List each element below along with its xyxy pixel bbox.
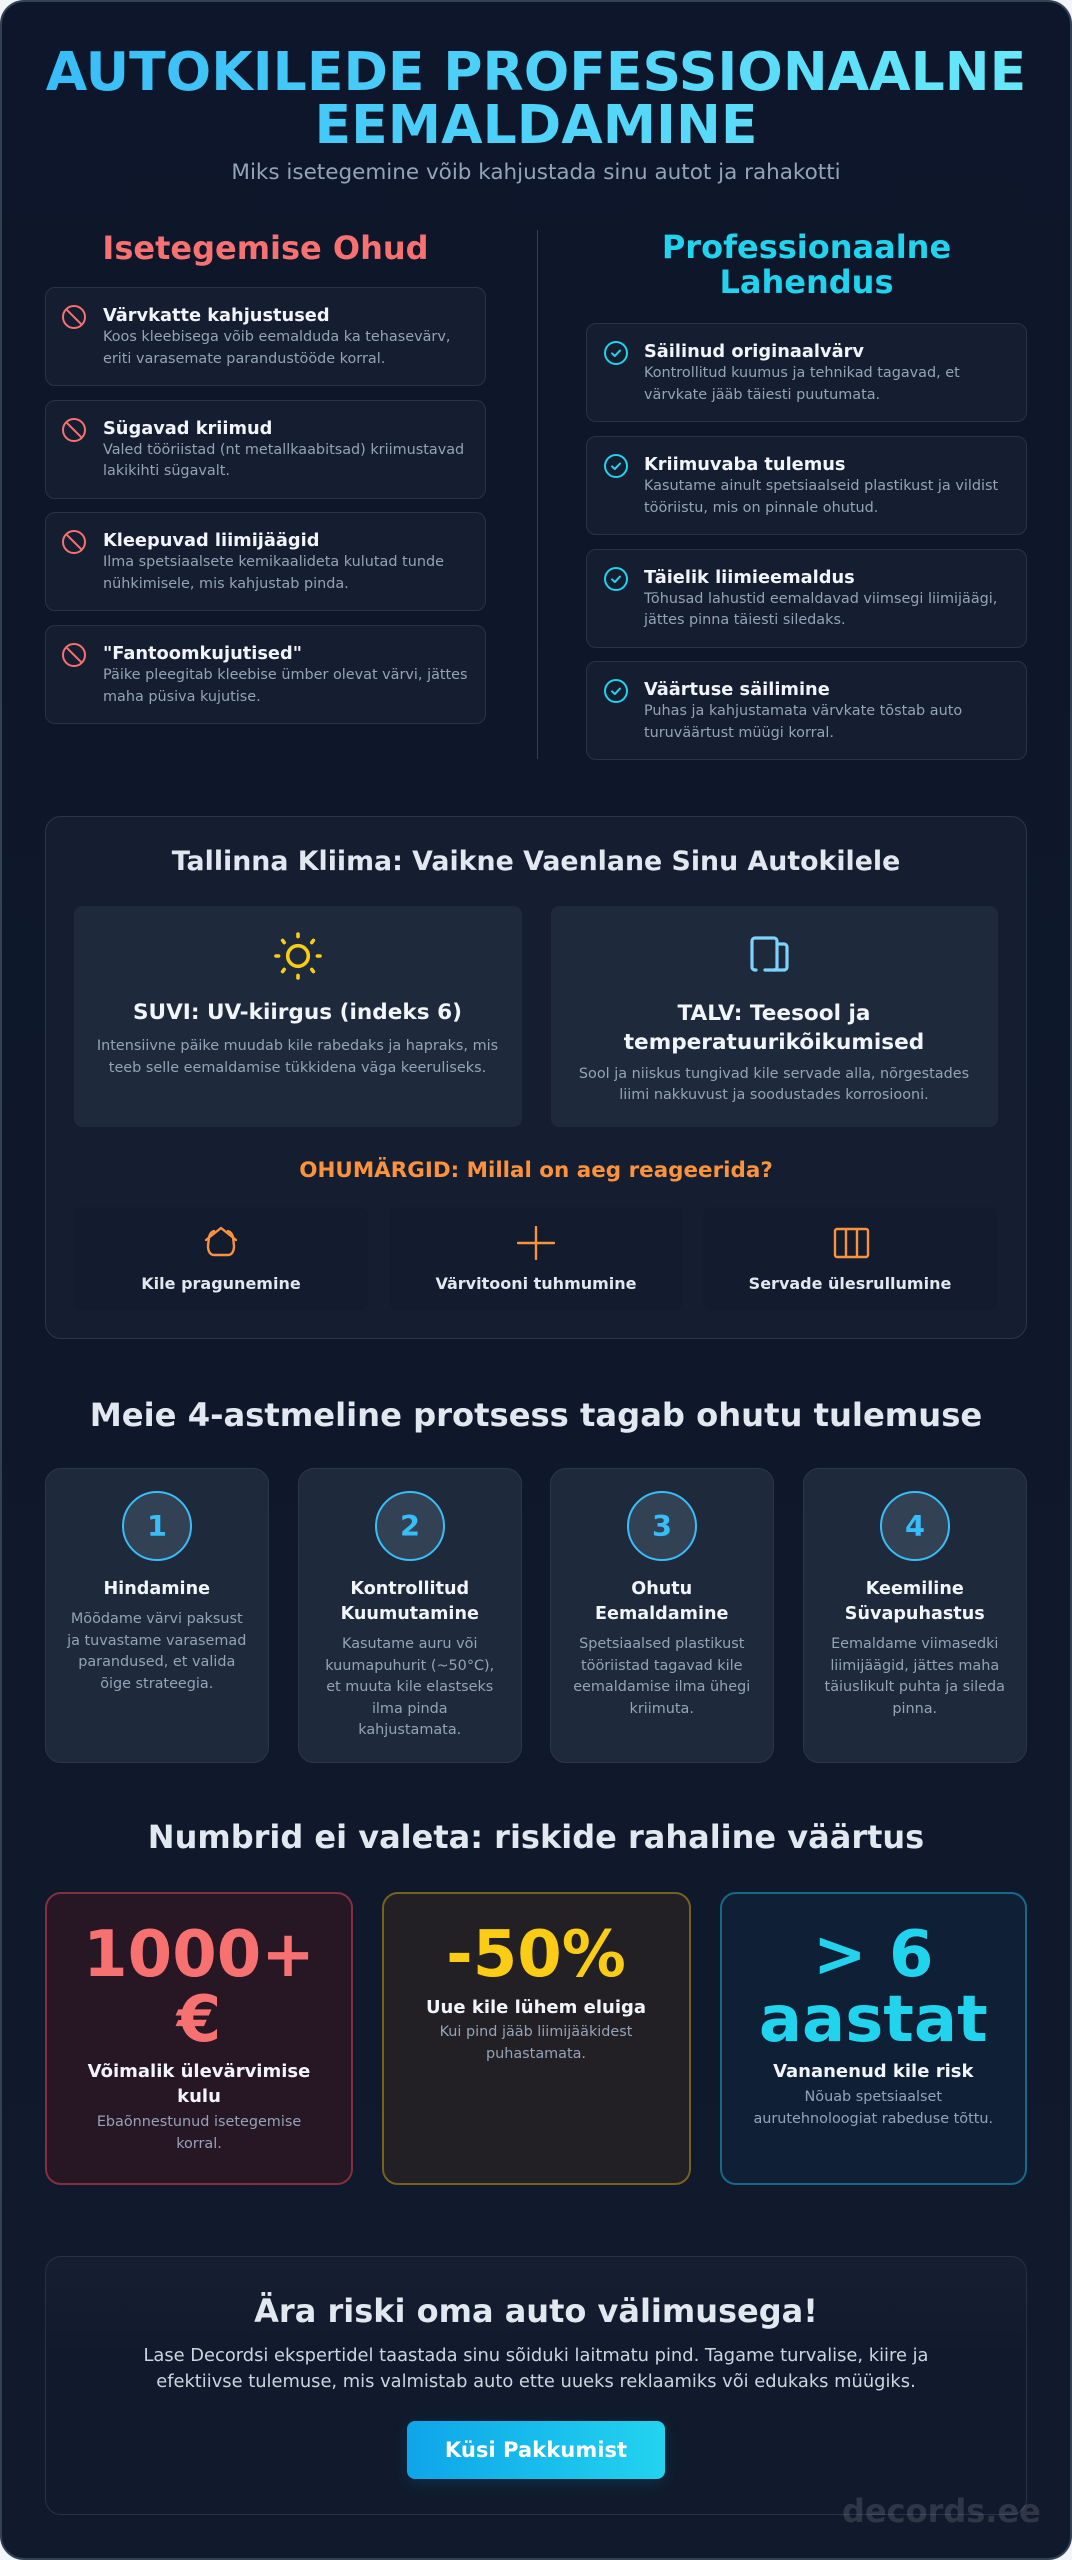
danger card 1: eriti varasemate parandustööde korral. — [103, 351, 385, 367]
icon: check — [604, 567, 628, 591]
winter heading: TALV: Teesool ja — [677, 1001, 870, 1026]
step 2: Kasutame auru või — [342, 1636, 477, 1652]
danger card 4 — [45, 625, 486, 724]
danger card 4: "Fantoomkujutised" — [103, 643, 302, 664]
icon: check — [604, 454, 628, 478]
icon: prohibited — [62, 418, 86, 442]
step 4 — [803, 1468, 1026, 1763]
solution card 3 — [586, 548, 1027, 648]
warning signs heading: OHUMÄRGID: Millal on aeg reageerida? — [299, 1158, 773, 1183]
solution card 3: jättes pinna täiesti siledaks. — [644, 612, 846, 628]
danger card 1: Värvkatte kahjustused — [103, 305, 330, 326]
step 2: kuumapuhurit (~50°C), — [325, 1658, 494, 1674]
danger card 3 — [45, 512, 486, 611]
solution card 4: Väärtuse säilimine — [644, 679, 830, 700]
danger card 4: maha püsiva kujutise. — [103, 689, 261, 705]
stat: repaint cost — [45, 1892, 353, 2185]
solution card 1: Säilinud originaalvärv — [644, 341, 864, 362]
heading: solution: Professionaalne — [662, 228, 951, 266]
stat: shorter lifetime — [382, 1892, 690, 2185]
step number — [880, 1491, 950, 1561]
title: EEMALDAMINE — [315, 93, 757, 156]
process heading: Meie 4-astmeline protsess tagab ohutu tulemuse — [90, 1396, 982, 1434]
sign label: Kile pragunemine — [141, 1274, 301, 1293]
stat: shorter lifetime: Uue kile lühem eluiga — [426, 1997, 646, 2018]
stat: age risk: Vananenud kile risk — [773, 2061, 973, 2082]
big number: -50% — [446, 1918, 626, 1992]
panel: DIY dangers — [45, 229, 486, 724]
step number: 1 — [147, 1509, 167, 1543]
step 2: ilma pinda — [372, 1700, 448, 1716]
sign: fading — [389, 1207, 683, 1310]
CTA text: efektiivse tulemuse, mis valmistab auto ette uueks reklaamiks või edukaks müügiks. — [156, 2371, 916, 2392]
CTA text — [143, 2345, 928, 2392]
step 4: täiuslikult puhta ja sileda — [825, 1679, 1005, 1695]
stat: repaint cost: Võimalik ülevärvimise — [88, 2061, 310, 2082]
step 2: et muuta kile elastseks — [326, 1679, 493, 1695]
winter text: liimi nakkuvust ja soodustades korrosiooni. — [619, 1087, 929, 1103]
icon: prohibited — [62, 643, 86, 667]
watermark: decords.ee — [842, 2492, 1041, 2530]
danger card 2: lakikihti sügavalt. — [103, 463, 230, 479]
heading: dangers: Isetegemise Ohud — [102, 229, 429, 267]
solution card 2: Kasutame ainult spetsiaalseid plastikust ja vildist — [644, 478, 998, 494]
CTA button: Küsi Pakkumist — [445, 2437, 627, 2462]
danger card 3: Ilma spetsiaalsete kemikaalideta kulutad tunde — [103, 554, 444, 570]
card: winter — [550, 906, 998, 1127]
title — [36, 45, 1036, 151]
danger card 1: Koos kleebisega võib eemalduda ka tehasevärv, — [103, 329, 450, 345]
step 3: Spetsiaalsed plastikust — [579, 1636, 744, 1652]
step 3: Eemaldamine — [595, 1604, 728, 1624]
step number — [122, 1491, 192, 1561]
summer heading: SUVI: UV-kiirgus (indeks 6) — [133, 1000, 462, 1025]
step 4: liimijäägid, jättes maha — [830, 1658, 999, 1674]
solution card 4: turuväärtust müügi korral. — [644, 725, 834, 741]
step number: 2 — [400, 1509, 420, 1543]
summer text: Intensiivne päike muudab kile rabedaks ja hapraks, mis — [97, 1038, 498, 1054]
step 1: õige strateegia. — [100, 1676, 213, 1692]
step 1: ja tuvastame varasemad — [67, 1632, 246, 1648]
card: summer — [74, 906, 522, 1127]
icon: columns — [834, 1228, 870, 1258]
big number — [83, 1918, 315, 2057]
step 3: eemaldamise ilma ühegi — [573, 1679, 750, 1695]
winter heading: temperatuurikõikumised — [624, 1030, 924, 1055]
solution card 4: Puhas ja kahjustamata värvkate tõstab auto — [644, 703, 962, 719]
summer text: teeb selle eemaldamise tükkidena väga keeruliseks. — [109, 1060, 486, 1076]
step 1: Mõõdame värvi paksust — [71, 1611, 243, 1627]
step 2: Kuumutamine — [341, 1604, 479, 1624]
icon: check — [604, 341, 628, 365]
danger card 3: nühkimisele, mis kahjustab pinda. — [103, 576, 349, 592]
step number — [375, 1491, 445, 1561]
step 1: Hindamine — [103, 1579, 210, 1599]
stat: age risk: Nõuab spetsiaalset — [804, 2089, 942, 2105]
panel: professional solution — [586, 228, 1027, 760]
step 2 — [298, 1468, 522, 1763]
winter text: Sool ja niiskus tungivad kile servade alla, nõrgestades — [579, 1066, 969, 1082]
summer text — [97, 1038, 498, 1076]
step 4: Eemaldame viimasedki — [831, 1636, 998, 1652]
icon: check — [604, 679, 628, 703]
step 2: kahjustamata. — [358, 1722, 461, 1738]
stat: age risk: aurutehnoloogiat rabeduse tõttu. — [753, 2111, 993, 2127]
solution card 2: tööriistu, mis on pinnale ohutud. — [644, 500, 878, 516]
sign label: Värvitooni tuhmumine — [435, 1274, 637, 1293]
solution card 1: Kontrollitud kuumus ja tehnikad tagavad, et — [644, 365, 960, 381]
heading: solution: Lahendus — [720, 263, 893, 301]
icon: sun — [274, 932, 322, 980]
step number: 3 — [652, 1509, 672, 1543]
step 3 — [550, 1468, 774, 1763]
solution card 3: Tõhusad lahustid eemaldavad viimsegi liimijäägi, — [644, 590, 997, 606]
step 3: kriimuta. — [630, 1700, 694, 1716]
sign: edges peeling — [703, 1207, 997, 1310]
climate heading: Tallinna Kliima: Vaikne Vaenlane Sinu Autokilele — [172, 846, 900, 877]
winter heading — [624, 1001, 924, 1055]
danger card 3: Kleepuvad liimijäägid — [103, 530, 319, 551]
step number: 4 — [905, 1509, 925, 1543]
step 4: Keemiline — [866, 1579, 964, 1599]
icon: cracking film — [204, 1226, 238, 1256]
stat: shorter lifetime: Kui pind jääb liimijääkidest — [440, 2024, 632, 2040]
solution card 2: Kriimuvaba tulemus — [644, 454, 846, 475]
CTA button — [407, 2421, 665, 2479]
step 1: parandused, et valida — [78, 1654, 235, 1670]
winter text — [579, 1066, 969, 1103]
step 3: tööriistad tagavad kile — [581, 1658, 742, 1674]
danger card 2 — [45, 400, 486, 499]
big number: 1000+ — [83, 1918, 315, 1992]
icon: prohibited — [62, 305, 86, 329]
sign label: Servade ülesrullumine — [749, 1274, 951, 1293]
solution card 2 — [586, 436, 1027, 535]
stat: shorter lifetime: puhastamata. — [486, 2046, 586, 2062]
step number — [627, 1491, 697, 1561]
stat: age risk — [720, 1892, 1027, 2185]
danger card 4: Päike pleegitab kleebise ümber olevat värvi, jättes — [103, 667, 468, 683]
icon: winter salt — [750, 936, 789, 972]
big number: > 6 — [813, 1918, 933, 1992]
CTA text: Lase Decordsi ekspertidel taastada sinu sõiduki laitmatu pind. Tagame turvalise, kiire ja — [143, 2345, 928, 2366]
solution card 3: Täielik liimieemaldus — [644, 566, 855, 588]
panel: call to action — [45, 2256, 1027, 2515]
step 4: pinna. — [892, 1700, 937, 1716]
step 3: Ohutu — [631, 1579, 692, 1599]
stat: repaint cost: korral. — [176, 2136, 222, 2152]
sign: cracking — [74, 1207, 368, 1310]
solution card 4 — [586, 661, 1027, 760]
numbers heading: Numbrid ei valeta: riskide rahaline väärtus — [148, 1818, 924, 1856]
panel: Tallinn climate — [45, 816, 1027, 1339]
big number: € — [177, 1983, 221, 2057]
stat: repaint cost: kulu — [177, 2086, 221, 2107]
big number: aastat — [759, 1983, 988, 2057]
step 4: Süvapuhastus — [845, 1604, 985, 1624]
icon: prohibited — [62, 530, 86, 554]
danger card 1 — [45, 287, 486, 386]
big number — [759, 1918, 988, 2057]
title: AUTOKILEDE PROFESSIONAALNE — [46, 40, 1026, 103]
solution card 1: värvkate jääb täiesti puutumata. — [644, 387, 880, 403]
heading: solution — [662, 228, 951, 301]
solution card 1 — [586, 323, 1027, 422]
danger card 2: Valed tööriistad (nt metallkaabitsad) kriimustavad — [103, 442, 464, 458]
CTA heading: Ära riski oma auto välimusega! — [254, 2292, 818, 2330]
subtitle: Miks isetegemine võib kahjustada sinu autot ja rahakotti — [231, 160, 841, 185]
stat: repaint cost: Ebaõnnestunud isetegemise — [97, 2114, 301, 2130]
step 2: Kontrollitud — [350, 1579, 469, 1599]
icon: plus — [517, 1226, 555, 1260]
danger card 2: Sügavad kriimud — [103, 418, 272, 439]
step 1 — [45, 1468, 268, 1763]
